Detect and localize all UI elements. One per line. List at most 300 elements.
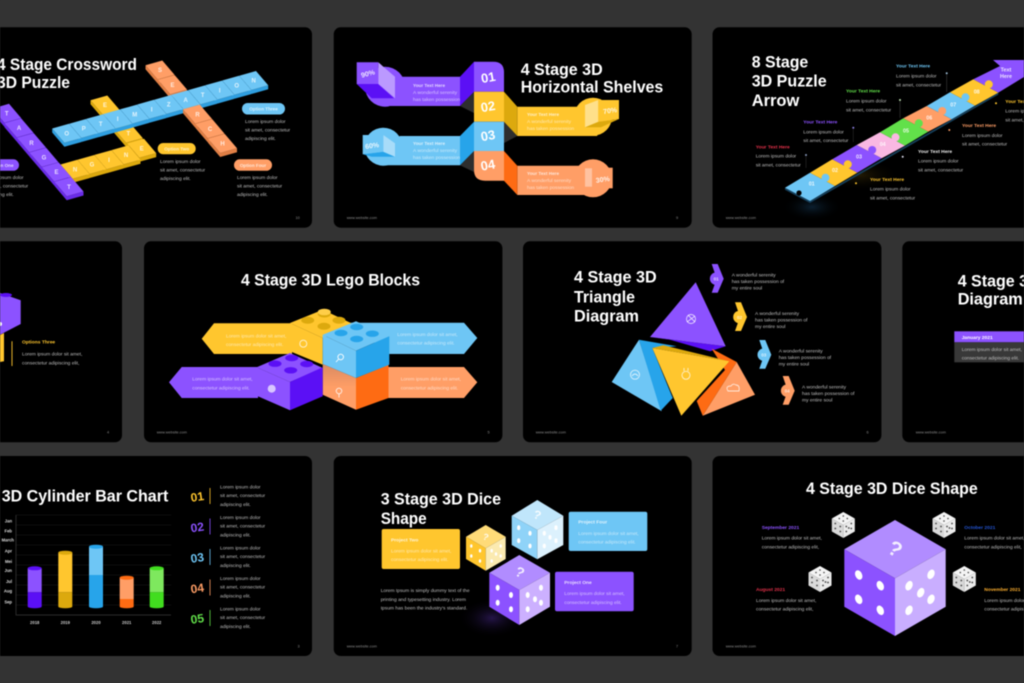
card project one — [555, 572, 634, 611]
icon: purple block — [0, 293, 21, 362]
title: puzzle arrow: Arrow — [752, 92, 799, 110]
glow — [458, 598, 526, 638]
small die top left — [832, 512, 855, 538]
legend 03: sit amet, consectetur — [220, 554, 265, 560]
option four label — [234, 159, 282, 198]
lego brick orange — [323, 364, 388, 410]
callout yellow — [855, 177, 915, 202]
crossword letters: I — [108, 158, 110, 164]
callout white — [902, 149, 963, 174]
crossword letters: A — [184, 98, 189, 104]
bar chart: Jun — [5, 568, 12, 573]
shelf 01 purple: 90% — [360, 69, 377, 80]
lego brick purple — [257, 353, 323, 410]
title: 3 stage dice: 3 Stage 3D Dice — [381, 490, 501, 508]
bar chart: Feb — [5, 528, 12, 534]
label november: November 2021 — [984, 587, 1021, 593]
callout purple: sit amet, consectetur — [803, 138, 849, 144]
label october: consectetur adipiscing elit, — [964, 544, 1022, 550]
shelf 01 purple: Your Text Here — [413, 83, 445, 88]
panel: 4 stage 3D dice shape — [712, 456, 1024, 656]
option four label: Lorem ipsum dolor — [237, 175, 278, 181]
crossword letters: E — [170, 83, 175, 89]
option four label: Option Four — [240, 163, 266, 168]
callout red: sit amet, consectetur — [756, 162, 801, 168]
title: diagram — [958, 272, 1024, 309]
card project one: Project One — [564, 580, 592, 586]
shelf 03 blue: A wonderful serenity — [413, 148, 458, 154]
callout purple — [803, 120, 854, 144]
callout blue — [896, 64, 948, 92]
legend 03: Lorem ipsum dolor — [220, 546, 261, 552]
panel: partial diagram slide — [902, 241, 1024, 442]
callout green: sit amet, consectetur — [846, 108, 891, 114]
card project two — [382, 529, 460, 569]
footer: 7 — [676, 644, 678, 648]
title: 4 stage dice: 4 Stage 3D Dice Shape — [806, 480, 978, 498]
bar chart: Jul — [6, 579, 12, 584]
callout blue: Your Text Here — [896, 64, 930, 70]
shelf 04 orange: A wonderful serenity — [527, 178, 572, 184]
puzzle arrow: 06 — [926, 115, 932, 121]
title: lego: 4 Stage 3D Lego Blocks — [241, 272, 420, 290]
text 04: has taken possession of — [802, 391, 855, 397]
label august: Lorem ipsum dolor sit amet, — [756, 598, 816, 604]
card project two: consectetur adipiscing elit. — [391, 557, 448, 563]
legend 04 — [190, 576, 265, 600]
callout orange: Your Text Here — [962, 123, 996, 129]
small die mid right — [953, 566, 976, 592]
timeline card january: January 2021 — [962, 335, 993, 341]
body text: printing and typesetting industry. Lorem — [381, 597, 466, 603]
crossword letters: S — [158, 68, 162, 74]
callout yellow: Your Text Here — [870, 177, 904, 183]
callout red — [756, 144, 807, 168]
page number: 4 — [107, 430, 109, 434]
title: 3 stage dice: Shape — [381, 510, 427, 528]
bar chart — [2, 515, 171, 625]
text 03 — [779, 349, 832, 368]
panel: 3D cylinder bar chart — [0, 456, 312, 656]
page number: 3 — [298, 644, 300, 648]
text 02: has taken possession of — [755, 318, 808, 324]
option two label — [158, 143, 205, 182]
arrow band yellow: consectetur adipiscing elit. — [226, 342, 283, 348]
label august — [756, 587, 816, 612]
option three text: Options Three — [22, 340, 55, 346]
crossword letters: T — [126, 132, 130, 138]
title: shelves: 4 Stage 3D — [521, 61, 603, 79]
legend 02: sit amet, consectetur — [220, 524, 265, 530]
shelf 04 orange: 04 — [479, 156, 497, 174]
card project four: consectetur adipiscing elit. — [578, 540, 636, 546]
legend 02: adipiscing elit. — [220, 532, 251, 538]
shelf 02 yellow: has taken possession — [527, 126, 574, 132]
label september: Lorem ipsum dolor sit amet, — [762, 536, 822, 542]
timeline card january — [954, 331, 1024, 362]
bar chart: 2021 — [122, 620, 132, 625]
shelf 03 blue: has taken possession — [413, 155, 460, 161]
card project four — [569, 512, 647, 551]
puzzle arrow: 08 — [974, 90, 980, 96]
text 04 — [802, 385, 855, 404]
crossword tiles — [0, 60, 268, 200]
card project four: Lorem ipsum dolor sit amet, — [578, 531, 639, 537]
label september: consectetur adipiscing elit, — [762, 544, 819, 550]
triangle icons — [630, 314, 739, 391]
arrow band purple: Lorem ipsum dolor sit amet, — [192, 376, 253, 382]
callout purple: Lorem ipsum dolor — [803, 130, 844, 136]
callout orange: sit amet, consectetur — [962, 142, 1007, 148]
option one label — [0, 159, 28, 198]
legend 01: sit amet, consectetur — [220, 493, 265, 499]
label october: October 2021 — [964, 525, 996, 531]
puzzle arrow: 05 — [903, 129, 909, 135]
arrow band purple — [169, 367, 258, 398]
arrow band blue: Lorem ipsum dolor sit amet, — [397, 332, 458, 338]
title: crossword: 4 Stage Crossword — [0, 56, 137, 74]
die purple: ? — [513, 563, 527, 581]
option three label: Option Three — [249, 106, 278, 112]
crossword letters: T — [67, 185, 71, 191]
cylinder 2018 — [28, 566, 42, 608]
option three label: adipiscing elit. — [245, 136, 276, 142]
bar chart: 2018 — [30, 620, 40, 625]
crossword letters: T — [201, 93, 205, 99]
shelf 02 yellow: A wonderful serenity — [527, 119, 572, 125]
shelf 03 blue: 03 — [479, 127, 496, 144]
label september — [762, 525, 822, 550]
die yellow: ? — [481, 531, 490, 543]
big die: ? — [883, 536, 906, 563]
badge 02: 02 — [737, 315, 742, 320]
footer — [157, 430, 490, 434]
option three label — [242, 103, 290, 142]
bar chart: 2019 — [61, 620, 71, 625]
body text: Lorem Ipsum is simply dummy text of the — [381, 588, 470, 594]
text 01: has taken possession of — [732, 279, 785, 285]
legend 02: Lorem ipsum dolor — [220, 515, 261, 521]
text 04: my entire soul — [802, 398, 832, 404]
option three label: Lorem ipsum dolor — [245, 119, 286, 125]
crossword letters: I — [117, 117, 119, 123]
panel: partial options slide — [0, 241, 122, 442]
crossword letters: R — [29, 141, 34, 147]
badge 04: 04 — [785, 388, 790, 394]
legend 01: adipiscing elit. — [220, 502, 251, 508]
crossword letters: I — [219, 88, 221, 94]
shelf 01 purple: A wonderful serenity — [413, 90, 458, 96]
crossword letters: C — [208, 127, 213, 133]
shelf 04 orange: Your Text Here — [527, 171, 559, 176]
footer: 6 — [866, 430, 869, 434]
callout orange: Lorem ipsum dolor — [962, 133, 1003, 139]
badge 03: 03 — [761, 352, 767, 358]
legend 05: 05 — [190, 611, 205, 627]
callout green — [846, 88, 901, 118]
callout blue: sit amet, consectetur — [896, 82, 941, 88]
callout yellow: Lorem ipsum dolor — [870, 186, 911, 192]
shelf 03 blue: 60% — [365, 142, 380, 151]
title: triangle: Diagram — [574, 307, 639, 325]
die purple — [489, 555, 550, 625]
label november — [984, 587, 1024, 612]
panel: 4 stage crossword 3D puzzle — [0, 27, 312, 228]
legend 01 — [190, 484, 265, 508]
legend 01: 01 — [190, 489, 205, 505]
puzzle arrow: 01 — [809, 181, 815, 187]
label august: consectetur adipiscing elit, — [756, 606, 813, 612]
puzzle arrow: 04 — [880, 142, 886, 148]
crossword letters: T — [99, 122, 103, 128]
shelf 04 orange: 30% — [595, 176, 611, 185]
title: shelves — [521, 61, 663, 96]
crossword letters: O — [234, 84, 239, 90]
crossword letters: N — [252, 79, 256, 85]
crossword letters: E — [54, 170, 59, 176]
lego brick blue — [323, 321, 389, 378]
text 02: A wonderful serenity — [755, 311, 800, 317]
crossword letters: A — [17, 126, 22, 132]
puzzle arrow: 03 — [856, 155, 862, 161]
panel: 3 stage 3D dice shape — [334, 456, 692, 656]
shelf 04 orange — [474, 151, 613, 197]
crossword letters: E — [103, 103, 107, 109]
shelf 04 orange: has taken possession — [527, 185, 574, 191]
option four label: adipiscing elit. — [237, 192, 268, 198]
label october: Lorem ipsum dolor sit amet, — [964, 536, 1024, 542]
legend 05: adipiscing elit. — [220, 624, 251, 630]
label october — [964, 525, 1024, 550]
legend 04: Lorem ipsum dolor — [220, 576, 261, 582]
arrow glow — [782, 159, 900, 221]
title: 3 stage dice — [381, 490, 501, 528]
title: puzzle arrow — [752, 53, 827, 110]
shelf 02 yellow: Your Text Here — [527, 112, 559, 117]
text 02: my entire soul — [755, 324, 785, 330]
footer: 9 — [676, 216, 678, 220]
bar chart: Mei — [5, 559, 12, 564]
label august: August 2021 — [756, 587, 785, 593]
crossword letters: N — [73, 168, 77, 174]
shelf 03 blue: Your Text Here — [413, 141, 445, 146]
timeline card january: Lorem ipsum dolor sit amet, — [962, 347, 1022, 353]
panel: 4 stage 3D triangle diagram — [523, 241, 881, 442]
footer: www.website.com — [347, 644, 377, 648]
crossword letters: G — [42, 156, 47, 162]
badge 01 — [710, 264, 724, 293]
shelf 02 yellow: 70% — [603, 107, 618, 116]
triangle diagram — [612, 282, 755, 416]
bar chart: March — [2, 538, 14, 542]
title: triangle: 4 Stage 3D — [574, 268, 657, 286]
panel: 4 stage 3D horizontal shelves — [334, 27, 692, 228]
crossword letters: G — [90, 163, 95, 169]
bar chart: Jan — [5, 518, 12, 524]
text 04: A wonderful serenity — [802, 385, 847, 391]
title: triangle — [574, 268, 657, 325]
card project two: Lorem ipsum dolor sit amet, — [391, 548, 451, 554]
callout yellow: sit amet, consectetur — [870, 196, 915, 202]
die blue: ? — [531, 507, 543, 523]
footer: www.website.com — [726, 644, 756, 648]
option three label: sit amet, consectetur — [245, 128, 290, 134]
crossword letters — [5, 68, 256, 191]
shelf 01 purple — [357, 62, 504, 107]
crossword letters: P — [82, 127, 86, 133]
puzzle arrow — [785, 60, 1024, 203]
bar chart: Aug — [4, 588, 12, 594]
card project one: Lorem ipsum dolor sit amet, — [564, 591, 625, 597]
arrow band purple: consectetur adipiscing elit. — [192, 386, 250, 392]
badge 02 — [733, 302, 747, 331]
die yellow — [466, 525, 506, 571]
callout blue: Lorem ipsum dolor — [896, 74, 937, 80]
bar chart: Apr — [5, 548, 12, 554]
badge 03 — [758, 340, 771, 369]
arrow band blue: consectetur adipiscing elit. — [397, 340, 455, 346]
option two label: sit amet, consectetur — [160, 168, 205, 174]
crossword letters: I — [151, 108, 153, 114]
cylinder 2021 — [120, 576, 134, 608]
crossword letters: T — [5, 112, 9, 118]
shelf 03 blue — [363, 122, 504, 166]
option four label: sit amet, consectetur — [237, 184, 282, 190]
shelf 02 yellow — [474, 92, 619, 136]
arrow band orange: consectetur adipiscing elit. — [401, 386, 458, 392]
die blue — [512, 500, 563, 559]
body text: Ipsum has been the industry's standard. — [381, 606, 467, 612]
footer: 5 — [488, 430, 490, 434]
crossword letters: M — [132, 112, 137, 118]
title: diagram: Diagram — [958, 291, 1023, 309]
page number: 10 — [296, 216, 300, 220]
small die top right — [932, 512, 956, 538]
title: shelves: Horizontal Shelves — [521, 78, 663, 96]
body text — [381, 588, 470, 612]
legend 03: 03 — [190, 550, 205, 566]
cylinder 2020 — [89, 545, 103, 608]
footer — [536, 430, 869, 434]
crossword letters: E — [140, 146, 144, 152]
option two label: adipiscing elit. — [160, 176, 191, 182]
shelf 01 purple: 01 — [480, 69, 497, 86]
legend 04: sit amet, consectetur — [220, 584, 265, 590]
badge 04 — [781, 376, 795, 405]
legend 04: 04 — [190, 581, 205, 596]
footer — [347, 644, 678, 648]
lego brick yellow — [290, 309, 353, 365]
legend 02: 02 — [190, 520, 205, 535]
label september: September 2021 — [762, 525, 799, 531]
bar chart: 2022 — [152, 620, 162, 625]
arrow band orange: Lorem ipsum dolor sit amet, — [401, 376, 461, 382]
footer — [347, 216, 678, 220]
title: crossword — [0, 56, 137, 92]
option two label: Option Two — [164, 146, 189, 152]
callout purple: Your Text Here — [803, 120, 838, 126]
arrow band blue — [350, 323, 477, 354]
title: triangle: Triangle — [574, 288, 635, 306]
legend 03 — [190, 546, 265, 569]
footer: www.website.com — [726, 216, 756, 220]
puzzle arrow: 07 — [950, 102, 956, 108]
small die mid left — [808, 566, 832, 592]
text 02 — [755, 311, 808, 330]
puzzle arrow: Text — [1001, 68, 1012, 74]
callout red: Lorem ipsum dolor — [756, 154, 797, 160]
text 03: has taken possession of — [779, 355, 832, 361]
legend 04: adipiscing elit. — [220, 594, 251, 600]
callout red: Your Text Here — [756, 144, 790, 150]
bar chart: 2020 — [91, 620, 101, 625]
legend 05: sit amet, consectetur — [220, 615, 265, 621]
text 03: my entire soul — [779, 362, 809, 368]
card project four: Project Four — [578, 520, 607, 526]
cylinder 2022 — [150, 566, 164, 608]
shelf 02 yellow: 02 — [479, 98, 496, 115]
callout green: Lorem ipsum dolor — [846, 98, 887, 104]
callout white: sit amet, consectetur — [918, 168, 963, 174]
footer: www.website.com — [157, 430, 187, 434]
callout white: Lorem ipsum dolor — [918, 158, 959, 164]
callout orange — [948, 123, 1007, 148]
option three text — [12, 340, 82, 366]
arrow band orange — [386, 367, 477, 398]
badge 01: 01 — [714, 276, 719, 282]
crossword letters: R — [195, 112, 200, 118]
title: cylinder chart: 3D Cylinder Bar Chart — [2, 488, 169, 506]
footer: www.website.com — [347, 216, 377, 220]
footer: www.website.com — [916, 430, 946, 434]
arrow band yellow — [202, 323, 292, 354]
text 01 — [732, 272, 785, 292]
timeline card january: consectetur adipiscing elit. — [962, 356, 1019, 362]
panel: 4 stage 3D lego blocks — [144, 241, 502, 442]
title: puzzle arrow: 3D Puzzle — [752, 73, 827, 91]
card project one: consectetur adipiscing elit. — [564, 600, 622, 606]
title: puzzle arrow: 8 Stage — [752, 53, 808, 71]
callout yellow right — [995, 99, 1024, 124]
legend 05 — [190, 606, 265, 630]
option two label: Lorem ipsum dolor — [160, 159, 201, 165]
cylinder 2019 — [58, 551, 72, 608]
legend 02 — [190, 515, 265, 538]
bar chart: Sep — [4, 600, 12, 604]
callout white: Your Text Here — [918, 149, 952, 155]
text 03: A wonderful serenity — [779, 349, 823, 355]
fold shadows — [460, 92, 517, 172]
option three text: consectetur adipiscing elit, — [22, 360, 79, 366]
footer: www.website.com — [536, 430, 566, 434]
big die — [844, 520, 946, 636]
text 01: my entire soul — [732, 286, 762, 292]
puzzle arrow: 02 — [832, 168, 838, 174]
option three text: Lorem ipsum dolor sit amet, — [22, 352, 82, 358]
callout green: Your Text Here — [846, 88, 880, 94]
legend 03: adipiscing elit. — [220, 563, 251, 569]
panel: 8 stage 3D puzzle arrow — [712, 27, 1024, 228]
shelf 01 purple: has taken possession — [413, 97, 460, 103]
text 01: A wonderful serenity — [732, 272, 776, 278]
legend 01: Lorem ipsum dolor — [220, 484, 261, 490]
crossword letters: N — [124, 153, 128, 159]
legend 05: Lorem ipsum dolor — [220, 606, 261, 612]
arrow band yellow: Lorem ipsum dolor sit amet, — [226, 334, 286, 340]
card project two: Project Two — [391, 538, 418, 544]
crossword letters: H — [220, 142, 225, 148]
crossword letters: O — [64, 132, 69, 138]
